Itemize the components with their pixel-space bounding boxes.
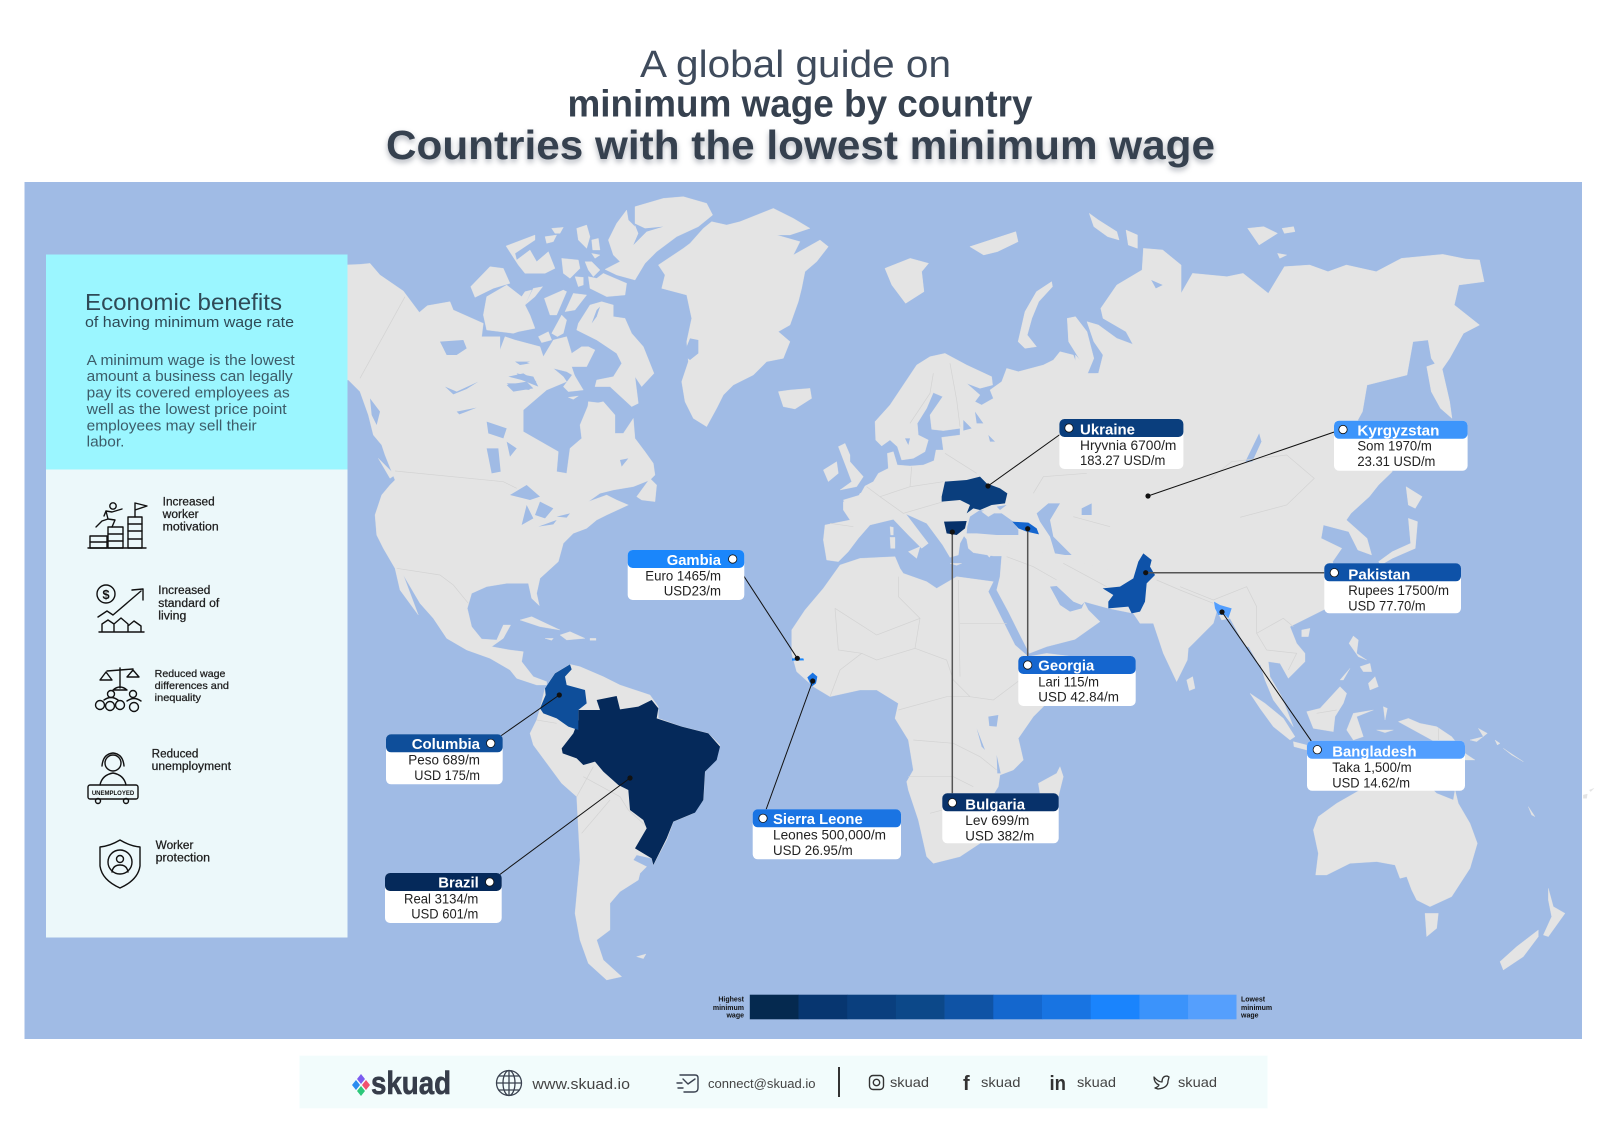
country: Bulgaria — [944, 521, 967, 535]
benefit: increased worker motivation: motivation — [163, 521, 219, 533]
icon: worker protection shield — [100, 840, 140, 888]
card: Ukraine: Hryvnia 6700/m — [1080, 437, 1176, 453]
card: Georgia: Lari 115/m — [1038, 673, 1099, 689]
benefit: reduced unemployment: unemployment — [152, 761, 232, 773]
card: Pakistan: Rupees 17500/m — [1348, 582, 1449, 598]
South America — [530, 664, 720, 980]
social: facebook: skuad — [981, 1074, 1020, 1090]
card: Brazil — [385, 873, 502, 923]
card: Gambia: Gambia — [667, 552, 722, 569]
country: Ukraine — [942, 477, 1007, 513]
benefit: reduced unemployment: Reduced — [152, 749, 198, 761]
icon: worker climbing steps — [88, 503, 147, 548]
country: Pakistan — [1103, 553, 1155, 613]
panel description: employees may sell their — [87, 417, 257, 434]
northern Eurasia — [885, 213, 1484, 665]
legend: wage colour scale: minimum — [713, 1005, 744, 1012]
benefit: worker protection: protection — [156, 853, 210, 865]
title line 3: Countries with the lowest minimum wage — [386, 122, 1215, 168]
card: Pakistan — [1324, 563, 1461, 613]
panel heading: of having minimum wage rate — [85, 314, 294, 331]
website: www.skuad.io — [531, 1076, 630, 1093]
benefit: reduced wage differences and inequality: Reduced wage — [155, 668, 226, 680]
country: Gambia — [792, 658, 804, 661]
logo: skuad: skuad — [371, 1065, 451, 1101]
social: instagram: skuad — [890, 1074, 929, 1090]
card: Bulgaria — [942, 793, 1059, 843]
panel background — [46, 254, 348, 938]
card: Columbia: USD 175/m — [414, 767, 480, 783]
benefit: increased standard of living: Increased — [158, 585, 210, 597]
icon: unemployed person with sign — [88, 753, 138, 804]
social: facebook: f — [963, 1073, 970, 1095]
social: linkedin — [1050, 1073, 1116, 1095]
Africa, southern Europe, Middle East and India — [792, 480, 1240, 863]
title — [386, 44, 1215, 168]
card: Bulgaria: USD 382/m — [965, 827, 1034, 843]
panel description: labor. — [87, 434, 124, 451]
card: Brazil: Real 3134/m — [404, 890, 478, 906]
country: Brazil — [562, 696, 720, 865]
card: Kyrgyzstan: Kyrgyzstan — [1357, 422, 1439, 440]
card: Kyrgyzstan: 23.31 USD/m — [1357, 453, 1435, 469]
panel: economic benefits — [46, 254, 348, 938]
card: Bangladesh: USD 14.62/m — [1332, 774, 1410, 790]
North America and Greenland — [343, 208, 828, 685]
card: Sierra Leone — [753, 809, 901, 859]
icon: balance scale and people — [96, 668, 141, 712]
card: Kyrgyzstan — [1334, 421, 1468, 471]
country: Colombia — [540, 664, 587, 730]
panel heading — [85, 289, 294, 331]
Canadian Arctic archipelago — [471, 197, 713, 420]
icon: email — [677, 1075, 698, 1092]
card: Ukraine — [1059, 419, 1183, 469]
legend: wage colour scale: wage — [725, 1013, 744, 1020]
card: Georgia: USD 42.84/m — [1038, 689, 1119, 705]
benefit: reduced wage differences and inequality: inequality — [155, 692, 202, 704]
country: Sierra Leone — [807, 673, 817, 687]
title line 2: minimum wage by country — [568, 84, 1032, 126]
benefit: worker protection: Worker — [156, 840, 194, 852]
card: Pakistan: USD 77.70/m — [1348, 597, 1426, 613]
social: linkedin: in — [1050, 1073, 1066, 1095]
card: Ukraine: Ukraine — [1080, 421, 1135, 438]
card: Bangladesh: Bangladesh — [1332, 744, 1417, 761]
card: Columbia: Columbia — [412, 736, 481, 753]
card: Sierra Leone: Leones 500,000/m — [773, 826, 886, 842]
card: Columbia — [386, 734, 503, 784]
panel heading: Economic benefits — [85, 289, 282, 315]
panel description: pay its covered employees as — [87, 384, 290, 402]
leader lines — [490, 428, 1343, 882]
card: Bulgaria: Lev 699/m — [965, 812, 1029, 828]
benefit: increased standard of living: living — [158, 611, 186, 623]
title line 1: A global guide on — [640, 44, 951, 86]
benefit: increased worker motivation: Increased — [163, 496, 215, 508]
South-East Asia and Oceania — [1180, 573, 1594, 970]
panel description: A minimum wage is the lowest — [87, 352, 296, 369]
panel header block — [46, 254, 348, 470]
panel description — [86, 352, 296, 451]
card: Gambia — [628, 550, 744, 600]
social: linkedin: skuad — [1077, 1074, 1116, 1090]
benefit: worker protection — [156, 840, 210, 865]
social: instagram — [870, 1074, 929, 1090]
benefit: increased standard of living — [158, 585, 220, 623]
legend: wage colour scale: minimum — [1241, 1005, 1272, 1012]
card: Pakistan: Pakistan — [1348, 566, 1410, 583]
card: Sierra Leone: USD 26.95/m — [773, 842, 853, 858]
card: Sierra Leone: Sierra Leone — [773, 811, 863, 828]
email address: connect@skuad.io — [708, 1076, 816, 1091]
icon: unemployed person with sign: UNEMPLOYED — [92, 791, 135, 797]
northern Europe, Black Sea and Caspian — [823, 352, 1110, 570]
card: Bulgaria: Bulgaria — [965, 796, 1026, 813]
card: Georgia — [1018, 656, 1136, 706]
card: Kyrgyzstan: Som 1970/m — [1357, 438, 1432, 454]
world map panel — [24, 182, 1594, 1039]
panel description: well as the lowest price point — [86, 401, 288, 418]
card: Gambia: Euro 1465/m — [645, 568, 721, 584]
benefit: increased worker motivation: worker — [162, 509, 199, 521]
card: Ukraine: 183.27 USD/m — [1080, 452, 1165, 468]
benefit: increased worker motivation — [162, 496, 219, 533]
legend: wage colour scale: Lowest — [1241, 997, 1266, 1004]
benefit: reduced wage differences and inequality — [155, 668, 229, 704]
panel description: amount a business can legally — [87, 368, 293, 385]
divider — [838, 1067, 840, 1097]
social: twitter: skuad — [1178, 1074, 1217, 1090]
benefit: increased standard of living: standard of — [158, 598, 220, 610]
legend: wage colour scale: wage — [1240, 1013, 1259, 1020]
icon: globe — [496, 1070, 522, 1096]
card: Brazil: Brazil — [438, 875, 479, 892]
social: twitter — [1154, 1074, 1217, 1090]
icon: rising standard of living: $ — [102, 587, 110, 602]
icon: rising standard of living — [97, 585, 144, 632]
ocean background — [24, 182, 1582, 1039]
card: Brazil: USD 601/m — [411, 906, 478, 922]
country: Bangladesh — [1214, 602, 1232, 618]
legend: wage colour scale: Highest — [718, 997, 745, 1004]
benefit: reduced wage differences and inequality: differences and — [155, 680, 229, 692]
card: Bangladesh — [1307, 741, 1465, 791]
benefit: reduced unemployment — [152, 749, 232, 773]
country: Georgia — [1012, 522, 1039, 534]
footer bar — [300, 1056, 1268, 1108]
card: Georgia: Georgia — [1038, 658, 1095, 675]
social: facebook — [963, 1073, 1020, 1095]
card: Bangladesh: Taka 1,500/m — [1332, 759, 1412, 775]
card: Gambia: USD23/m — [664, 583, 721, 599]
card: Columbia: Peso 689/m — [408, 751, 480, 767]
legend: wage colour scale — [713, 995, 1272, 1020]
